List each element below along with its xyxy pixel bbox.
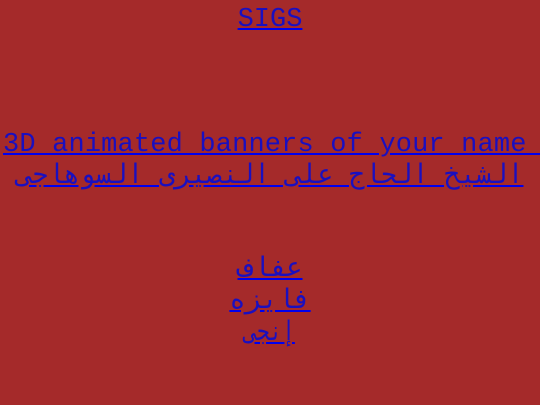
link: Arabic name 1: عفاف — [237, 255, 303, 285]
link: Arabic name line: الشيخ الحاج على النصيرى السوهاجى — [17, 162, 523, 192]
link: 3D animated banners of your name: 3D animated banners of your name — [3, 130, 527, 160]
link: Arabic name 2: فايزه — [229, 287, 311, 317]
link: Arabic name 3: إنجى — [245, 319, 295, 349]
heading: SIGS link: SIGS — [238, 5, 302, 35]
